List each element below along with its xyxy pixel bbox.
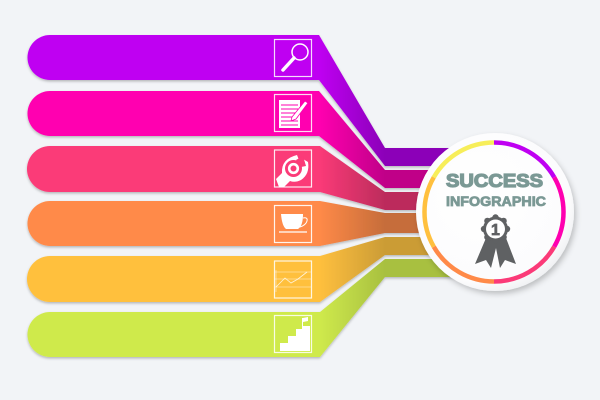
band 5: amber [27,237,480,302]
band 6: lime [28,259,480,357]
segmented ring [424,142,564,282]
icon: stairs and flag [274,316,312,352]
icon: coffee cup [274,206,312,242]
white disc [416,133,574,291]
band 3: rose [27,146,480,210]
title: success: SUCCESS [446,170,543,191]
central badge [416,133,574,291]
subtitle: infographic: INFOGRAPHIC [446,194,546,209]
icon: award rosette [475,214,516,268]
icon: line chart [274,261,312,298]
band 1: purple [28,35,480,166]
band 4: orange [28,201,480,246]
icon: magnifying glass [274,40,312,76]
icon: hand with gear [274,150,312,187]
icon: document and pencil [274,94,312,132]
band 2: magenta [28,91,480,188]
icon: award rosette: 1 [491,222,500,239]
